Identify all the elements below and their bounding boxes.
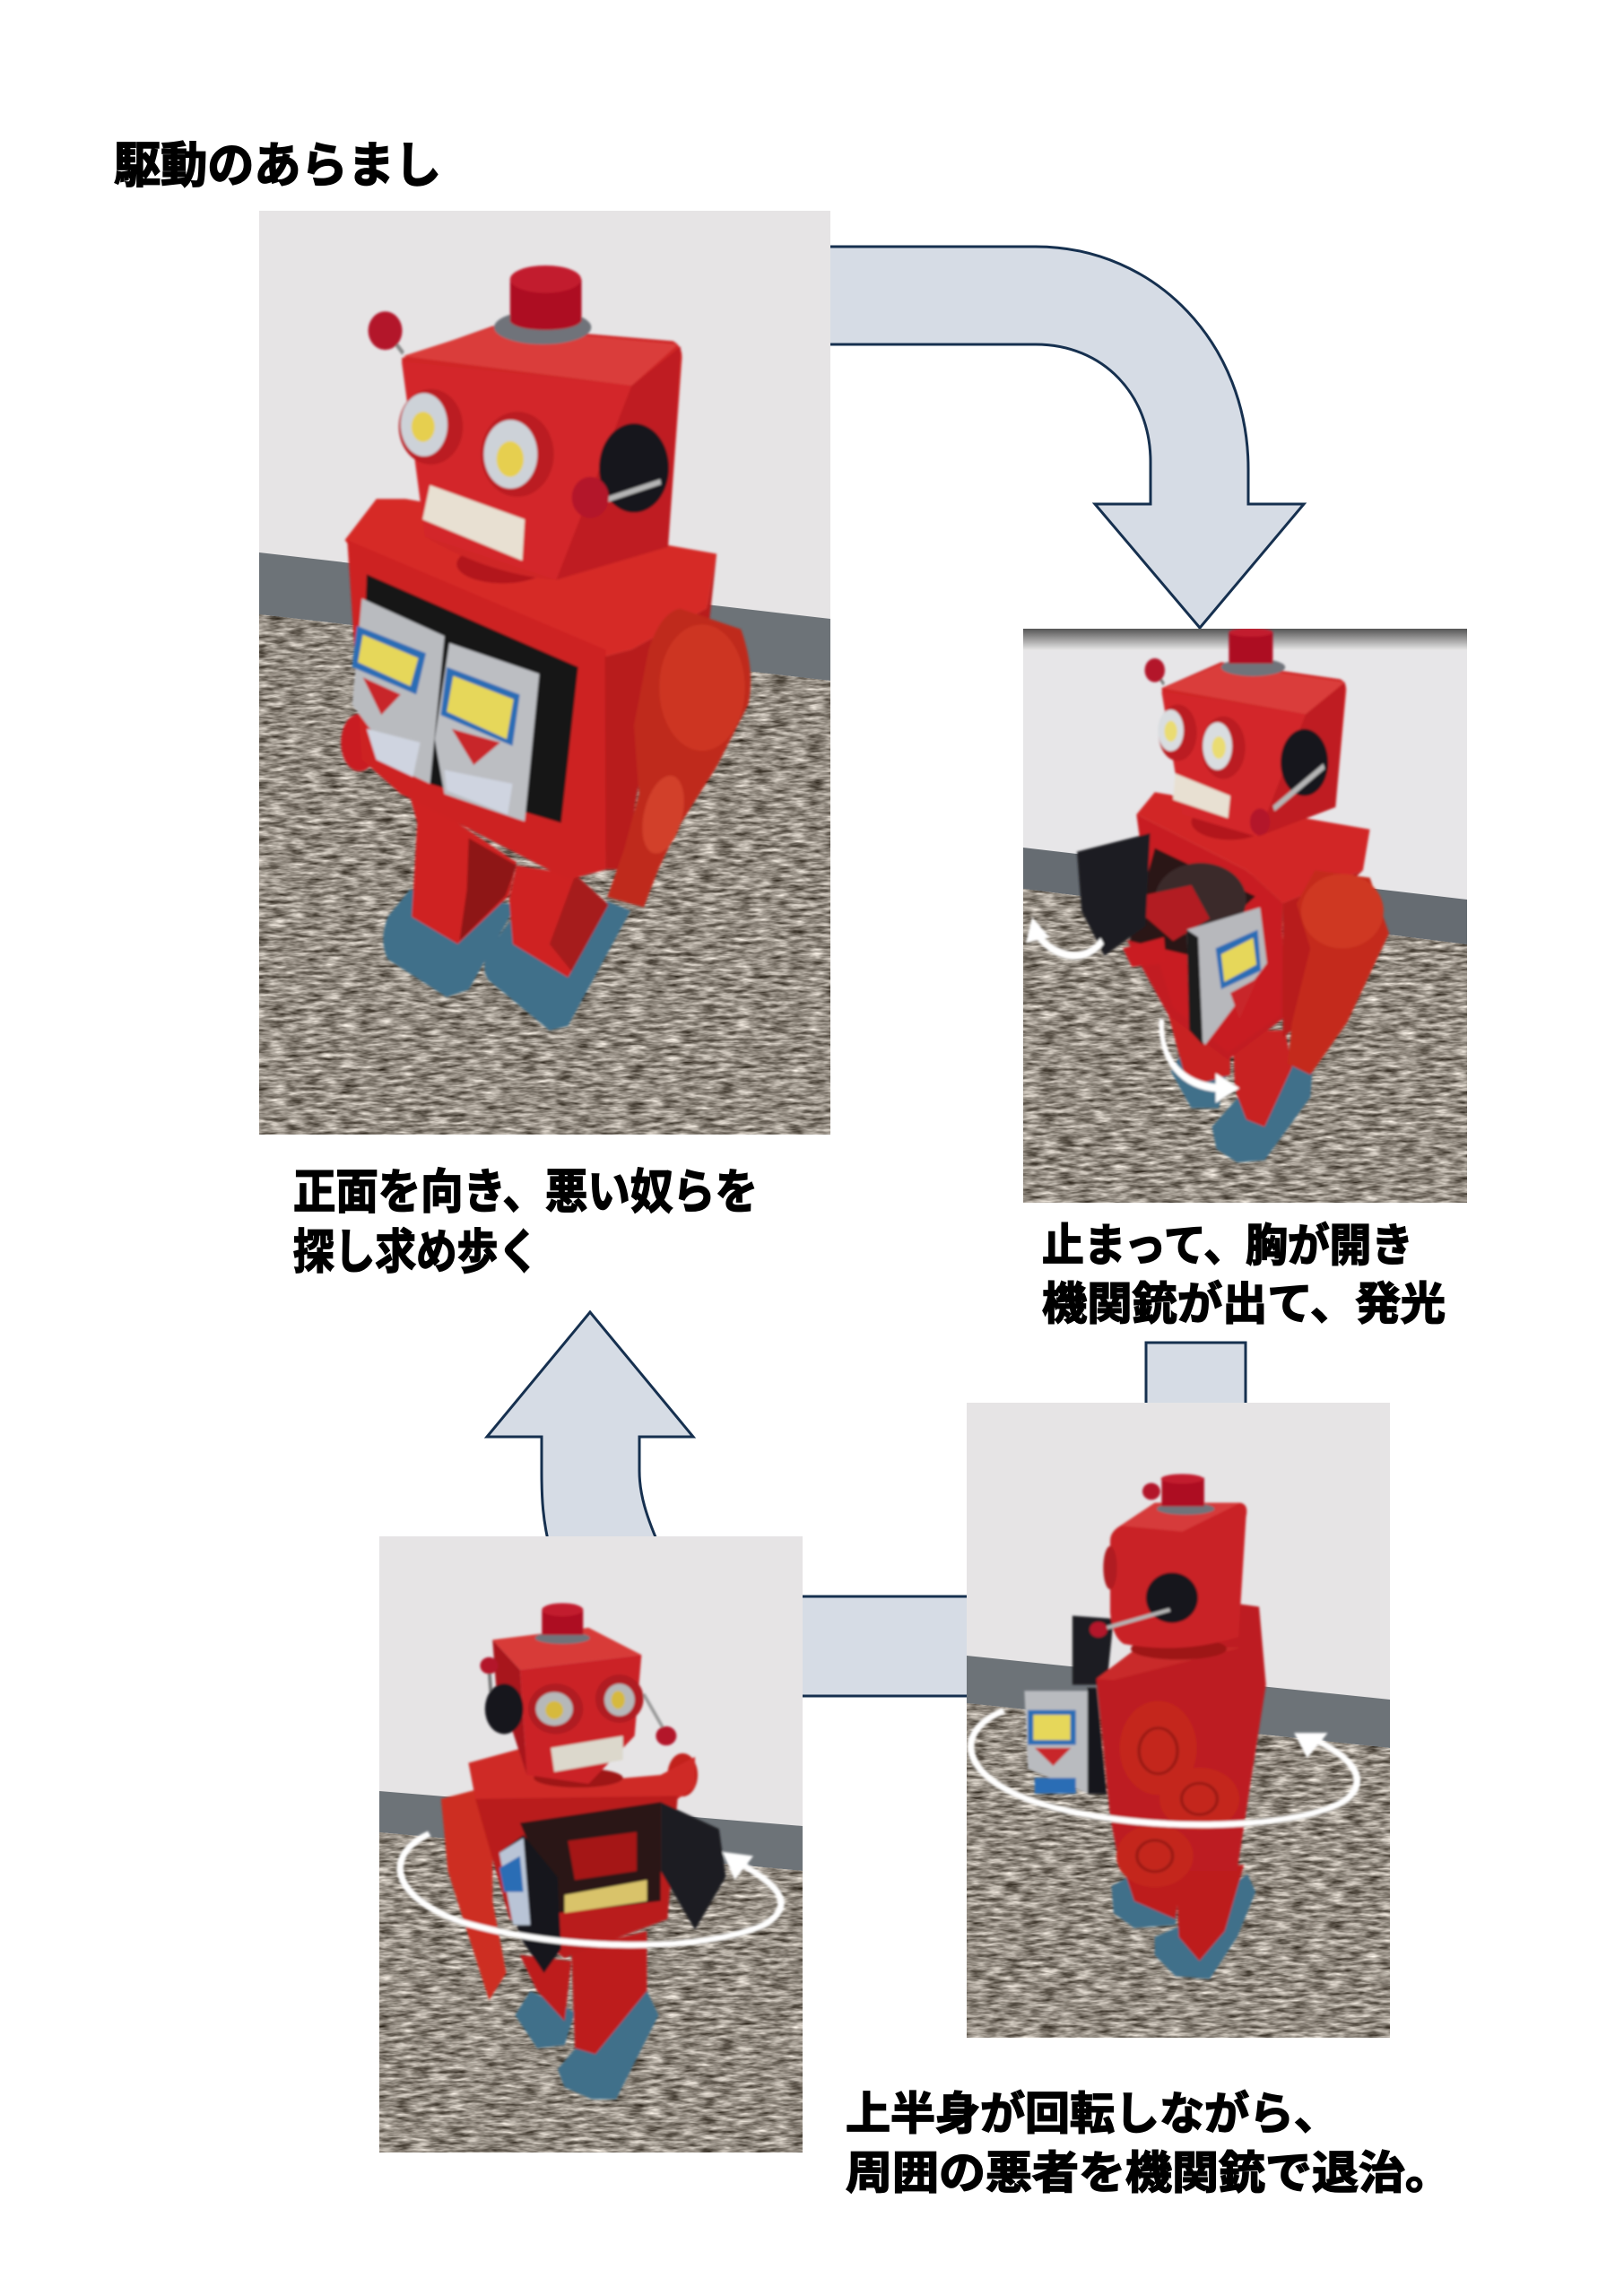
robot 2 eyes — [1158, 704, 1246, 778]
caption: photos 3 and 4: 上半身が回転しながら、 — [846, 2089, 1339, 2139]
caption: photo 1: 正面を向き、悪い奴らを — [293, 1166, 758, 1219]
robot 3 rear door — [1073, 1616, 1114, 1685]
robot 1 feet — [383, 890, 630, 1031]
robot 1 head — [402, 326, 682, 580]
photo 4: robot upper body rotating, opposite side — [379, 1536, 803, 2152]
robot 2 open right door — [1186, 908, 1267, 1045]
robot 1 side knob and crank — [572, 423, 669, 518]
robot 2 side knob and crank — [1250, 729, 1328, 835]
arrow: curved from photo 1 to photo 2 — [821, 247, 1304, 628]
robot 4 legs — [520, 1931, 647, 2054]
robot 3 head — [1103, 1503, 1246, 1648]
robot 4 eyes — [528, 1674, 644, 1734]
robot 4 right shoulder — [667, 1753, 698, 1796]
robot 1 torso — [345, 499, 716, 880]
white motion arrow: left door — [1026, 918, 1102, 956]
robot 4 open right door — [661, 1802, 725, 1930]
robot 2 legs — [1168, 1014, 1293, 1128]
caption: photos 3 and 4 — [846, 2089, 1452, 2198]
robot 4 side knob — [485, 1683, 524, 1734]
title: 駆動のあらまし — [114, 139, 441, 193]
robot 3 feet — [1112, 1874, 1255, 1979]
robot 2 dome light — [1221, 628, 1285, 676]
robot 4 antennas — [480, 1657, 676, 1745]
robot 3 arm — [1116, 1701, 1239, 1887]
robot 4 open left door — [499, 1835, 561, 1973]
arrow: from photo 2 down to photo 3 — [1146, 1343, 1246, 1414]
robot 1 legs — [408, 789, 608, 978]
robot 1 mouth — [422, 485, 525, 561]
robot 2 head — [1161, 662, 1346, 837]
robot 1 left chest door — [352, 598, 445, 784]
white rotation arrow — [971, 1710, 1357, 1824]
photo 3: robot upper body rotating, side view — [967, 1403, 1390, 2038]
robot 3 legs — [1120, 1859, 1244, 1961]
photo 2: robot opening chest — [1023, 628, 1467, 1203]
robot 2 feet — [1171, 1045, 1313, 1162]
robot 1 right chest door — [435, 643, 539, 822]
robot 3 side door panel — [1024, 1688, 1107, 1794]
robot 1 eyes — [399, 389, 554, 497]
caption: photo 1 — [293, 1166, 758, 1279]
robot 2 torso — [1123, 792, 1370, 1052]
caption: photos 3 and 4: 周囲の悪者を機関銃で退治。 — [846, 2148, 1452, 2198]
robot 1 hand — [339, 713, 371, 773]
robot 3 antenna — [1142, 1483, 1160, 1500]
robot 3 dome light — [1157, 1474, 1214, 1515]
robot 4 mouth — [551, 1735, 623, 1772]
arrow: up from photo 4 to photo 1 caption — [487, 1312, 693, 1552]
robot 1 neck — [456, 555, 534, 584]
robot 3 neck — [1131, 1638, 1227, 1659]
caption: photo 2: 機関銃が出て、発光 — [1042, 1279, 1446, 1329]
robot 3 side knob and crank — [1090, 1572, 1198, 1638]
robot 2 neck — [1191, 818, 1254, 840]
photo 1: robot facing front — [259, 211, 830, 1135]
white motion arrow: right door — [1161, 1019, 1239, 1103]
robot 4 feet — [515, 1991, 658, 2100]
robot 4 neck — [534, 1769, 623, 1787]
caption: photo 1: 探し求め歩く — [293, 1226, 539, 1279]
caption: photo 2 — [1042, 1221, 1446, 1329]
robot 4 dome light — [535, 1603, 590, 1644]
robot 4 head — [492, 1628, 641, 1784]
robot 3 torso — [1097, 1604, 1266, 1871]
arrow: from photo 3 left to photo 4 — [789, 1596, 977, 1696]
robot 2 arm — [1288, 870, 1389, 1074]
robot 4 arm — [441, 1790, 507, 2000]
robot 1 antenna — [369, 311, 404, 353]
white rotation arrow — [400, 1834, 781, 1945]
robot 2 mouth — [1173, 774, 1230, 818]
robot 2 open left door — [1077, 833, 1151, 956]
caption: photo 2: 止まって、胸が開き — [1042, 1221, 1413, 1271]
robot 1 arm — [607, 609, 751, 908]
robot 1 dome light — [494, 265, 591, 344]
robot 4 torso — [468, 1748, 695, 1958]
robot 2 antenna — [1145, 658, 1165, 684]
robot 2 lower body — [1125, 935, 1285, 1058]
